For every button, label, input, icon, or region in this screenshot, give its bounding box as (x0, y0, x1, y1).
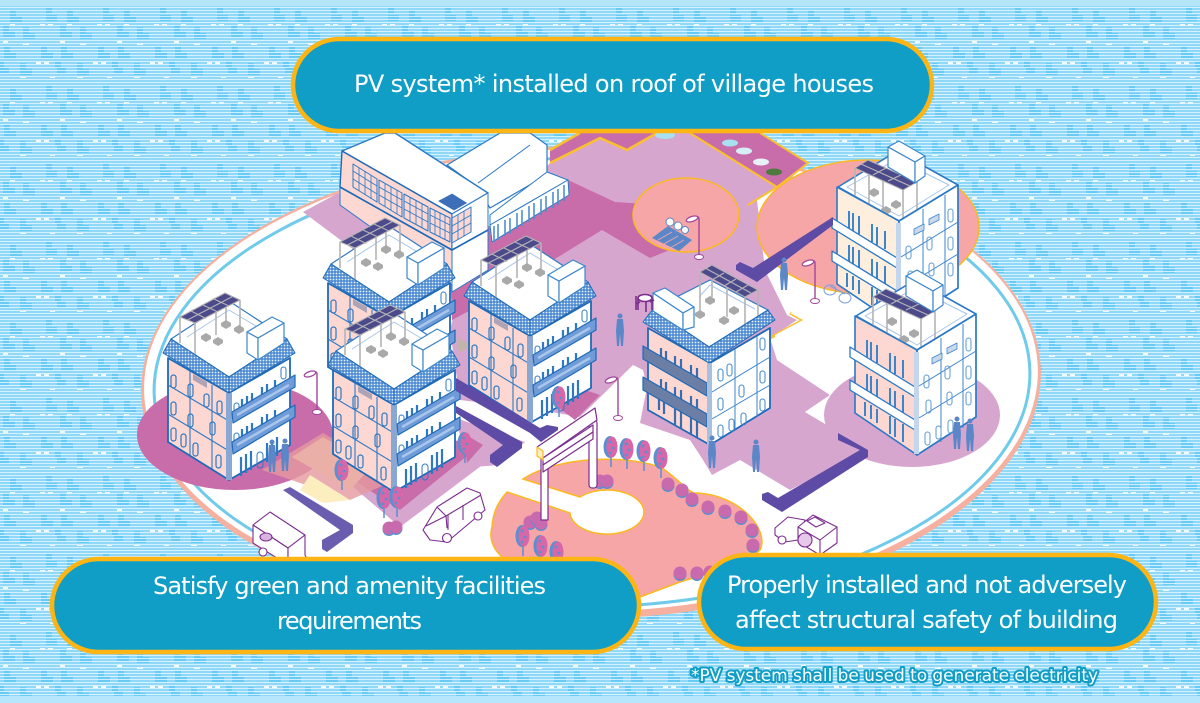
pond markers (655, 131, 782, 176)
building 7: right (850, 270, 976, 455)
callout: structural safety: Properly installed and not adversely (727, 571, 1127, 599)
plaza gate (537, 408, 597, 520)
callout: PV system: PV system* installed on roof of village houses (354, 70, 874, 98)
plaza (491, 459, 762, 597)
building 4: centre (464, 236, 596, 423)
callout: structural safety: affect structural safety of building (735, 606, 1118, 634)
street lamps (304, 215, 820, 420)
callout: PV system (293, 39, 932, 131)
bicycles (652, 218, 851, 303)
building 2: back left (323, 218, 455, 405)
purple paths (283, 217, 868, 552)
minivan (423, 488, 485, 542)
callout: green and amenity: requirements (277, 607, 422, 635)
people (268, 258, 974, 472)
building 5: centre right (643, 265, 775, 445)
bushes (382, 474, 760, 581)
cafe table (636, 294, 654, 312)
small utility truck (775, 515, 837, 555)
building 1: front left (163, 293, 295, 480)
salmon circle: bike park (633, 178, 739, 252)
salmon circle: large planter (757, 160, 979, 294)
footnote: *PV system shall be used to generate electricity (691, 666, 1098, 686)
callout: green and amenity (52, 559, 639, 652)
callout: green and amenity: Satisfy green and amenity facilities (153, 572, 546, 600)
building 6: top right (832, 141, 958, 326)
school building (340, 133, 569, 292)
ground ellipse (135, 133, 1047, 631)
paved zones (137, 133, 1000, 527)
delivery truck (253, 512, 310, 565)
building 3: front centre (328, 305, 460, 492)
trees (334, 386, 668, 572)
callout: structural safety (699, 555, 1156, 649)
